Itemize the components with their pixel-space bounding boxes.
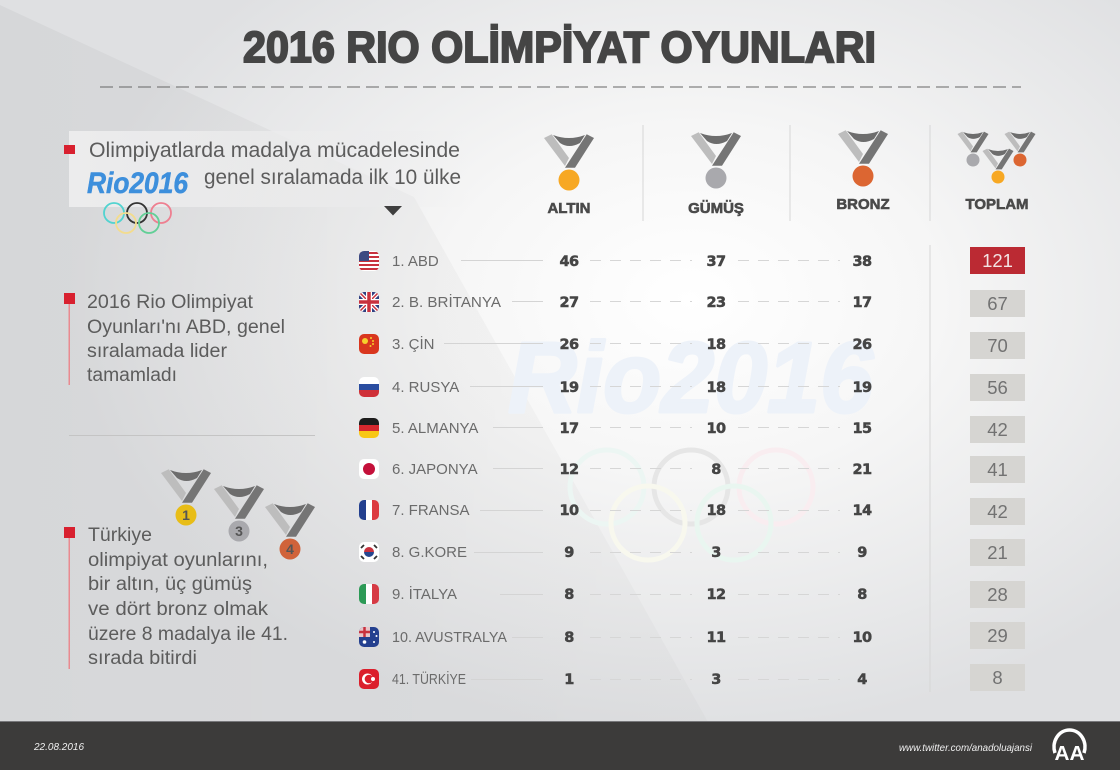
header: total [958,132,1036,213]
text block: Turkey result: olimpiyat oyunlarını, [88,550,268,571]
source link: www.twitter.com/anadoluajansi [899,742,1033,754]
icons: Turkey medals 1 3 4: 4 [286,541,294,557]
row: Turkey: 3 [711,672,721,688]
text block: USA leader: Oyunları'nı ABD, genel [87,317,285,338]
row: Japan: 8 [711,462,721,478]
header: total: TOPLAM [965,196,1029,213]
header: silver [688,132,744,217]
icon: AA logo [1054,730,1085,765]
flag: China [359,334,379,354]
header: silver: GÜMÜŞ [688,200,744,217]
row: Australia: 10 [853,630,872,646]
row: China: 3. ÇİN [392,335,435,353]
row: Turkey: 4 [857,672,867,688]
text block: Turkey result: sırada bitirdi [88,648,197,669]
row: UK: 2. B. BRİTANYA [392,293,501,311]
row: South Korea: 21 [987,542,1008,563]
header: gold: ALTIN [547,200,591,217]
row: France: 10 [560,503,579,519]
date: 22.08.2016 [33,742,84,753]
diagonal shaded background area [0,5,708,722]
row: France: 14 [853,503,872,519]
row: China: 18 [707,337,726,353]
watermark: Rio 2016 logo: Rio2016 [508,322,874,434]
header: gold [544,134,594,217]
flag: Russia [359,377,379,397]
row: Germany: 15 [853,421,872,437]
icons: Turkey medals 1 3 4: 3 [235,523,243,539]
row: Germany: 42 [987,419,1008,440]
row: South Korea: 3 [711,545,721,561]
icons: Turkey medals 1 3 4: 1 [182,507,190,523]
footer [0,721,1120,770]
row: Australia: 8 [564,630,574,646]
row: Australia: 29 [987,625,1008,646]
row: Italy: 12 [707,587,725,603]
row: Russia [359,374,1025,401]
row: Russia: 56 [987,377,1008,398]
row: Japan: 12 [560,462,578,478]
row: Italy: 8 [857,587,867,603]
icon: AA logo: AA [1054,743,1084,765]
row: UK: 17 [853,295,871,311]
column separators [643,125,930,692]
row: China: 26 [560,337,579,353]
row: USA: 1. ABD [392,253,439,270]
row: USA: 121 [982,250,1013,271]
row: Australia: 11 [707,630,726,646]
row: Italy [359,581,1025,608]
text block: Turkey result: ve dört bronz olmak [88,599,269,620]
text block: USA leader: sıralamada lider [87,341,228,362]
flag: France [359,500,379,520]
flag: Turkey [359,669,379,689]
title: 2016 RIO OLİMPİYAT OYUNLARI [243,23,876,72]
flag: USA [359,251,379,271]
row: Germany [359,416,1025,443]
row: Turkey: 8 [992,667,1003,688]
row: USA: 46 [560,254,579,270]
icons: Turkey medals 1 3 4 [161,469,315,560]
title dashed divider [100,86,1021,88]
row: Russia: 19 [560,380,579,396]
row: Japan: 6. JAPONYA [392,461,478,478]
row: Germany: 10 [707,421,726,437]
row: UK: 23 [707,295,725,311]
header: bronze [836,130,890,213]
row: France: 7. FRANSA [392,502,470,519]
row: China: 26 [853,337,872,353]
row: USA: 38 [853,254,872,270]
row: Turkey: 1 [564,672,574,688]
row: Australia: 10. AVUSTRALYA [392,629,507,646]
text block: Turkey result: bir altın, üç gümüş [88,574,252,595]
text block: Turkey result: üzere 8 madalya ile 41. [88,624,288,645]
panel: intro text with Rio logo: Rio2016 [87,167,188,200]
row: Japan [359,456,1025,483]
row: UK: 67 [987,293,1008,314]
row: Japan: 21 [853,462,872,478]
row: South Korea: 9 [857,545,867,561]
panel: intro text with Rio logo: Olimpiyatlarda madalya mücadelesinde [89,139,460,162]
text block: USA leader: tamamladı [87,365,177,386]
flag: Germany [359,418,379,438]
row: Russia: 18 [707,380,726,396]
flag: South Korea [359,542,379,562]
row: Italy: 9. İTALYA [392,585,457,603]
row: South Korea [359,539,1025,566]
row: South Korea: 9 [564,545,574,561]
row: Australia [359,622,1025,649]
text block: Turkey result: Türkiye [88,525,152,546]
row: France [359,498,1025,525]
text block: USA leader [64,292,285,386]
text block: Turkey result [64,525,288,669]
row: Italy: 28 [987,584,1008,605]
panel: intro text with Rio logo [64,131,469,233]
flag: Italy [359,584,379,604]
row: Turkey [359,664,1025,691]
flag: Japan [359,459,379,479]
arrow down [384,206,402,216]
row: China [359,332,1025,359]
row: Russia: 4. RUSYA [392,379,459,396]
row: Russia: 19 [853,380,872,396]
watermark: Olympic rings [570,450,813,560]
row: Germany: 5. ALMANYA [392,420,478,437]
header: bronze: BRONZ [836,196,890,213]
row: USA [359,247,1025,274]
flag: Australia [359,627,379,647]
text block: USA leader: 2016 Rio Olimpiyat [87,292,254,313]
panel: intro text with Rio logo: genel sıralamada ilk 10 ülke [204,166,461,189]
row: Italy: 8 [564,587,574,603]
row: Germany: 17 [560,421,578,437]
row: France: 18 [707,503,726,519]
row: China: 70 [987,335,1008,356]
row: USA: 37 [707,254,725,270]
row: France: 42 [987,501,1008,522]
row: South Korea: 8. G.KORE [392,544,467,561]
row: Turkey: 41. TÜRKİYE [392,670,466,688]
flag: UK [359,292,379,312]
row: UK [359,290,1025,317]
row: Japan: 41 [987,459,1008,480]
row: UK: 27 [560,295,578,311]
